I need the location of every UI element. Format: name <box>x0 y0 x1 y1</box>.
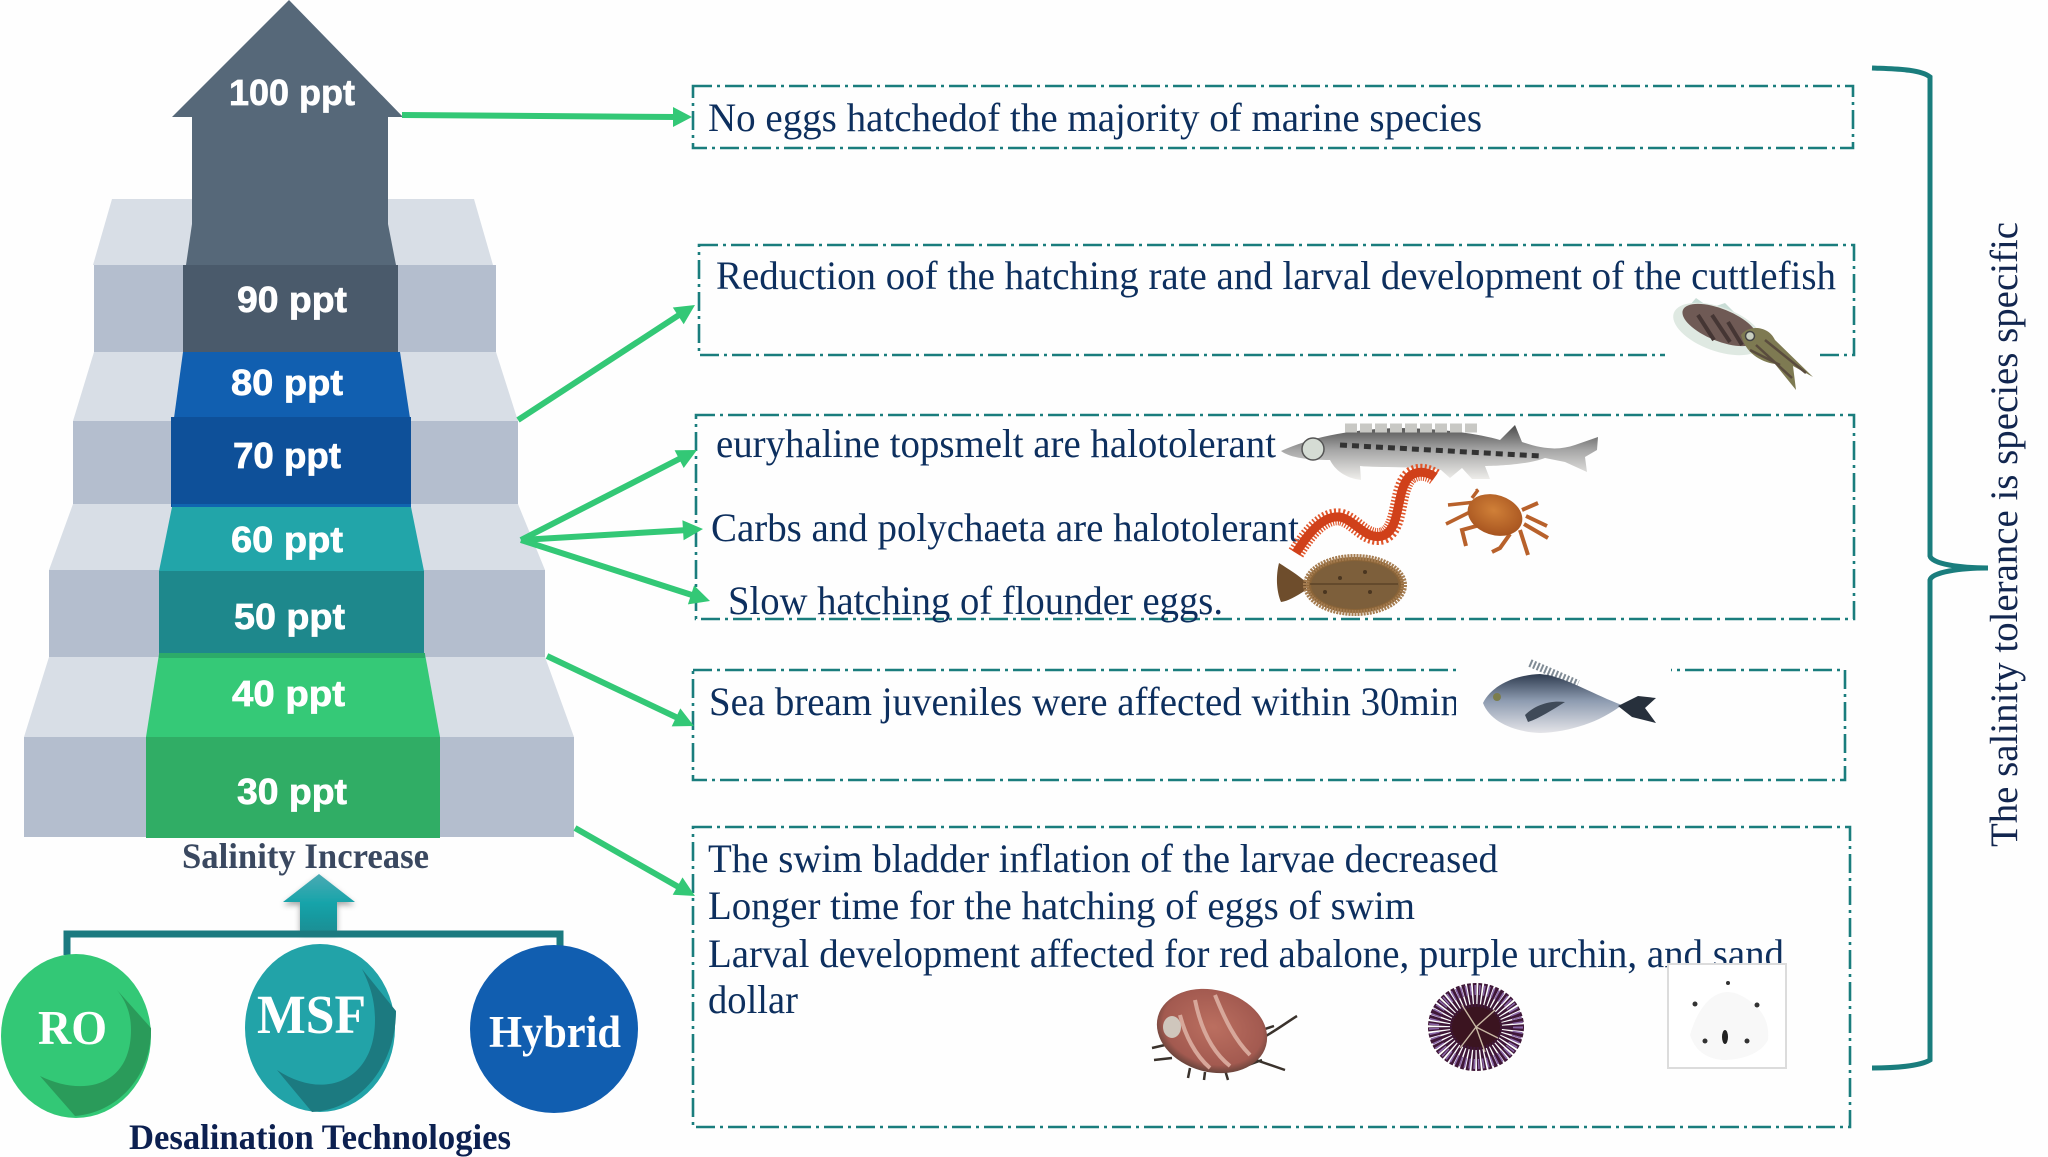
arrow: 80 ppt to panel <box>518 305 695 420</box>
40 ppt step: 40 ppt <box>232 673 345 714</box>
icon: cuttlefish <box>1666 292 1813 390</box>
RO circle: RO <box>38 1000 107 1055</box>
panel: 30 ppt effects: The swim bladder inflation of the larvae decreased <box>708 836 1498 881</box>
80 ppt step: 80 ppt <box>231 362 343 403</box>
panel: 30 ppt effects <box>693 827 1850 1127</box>
70 ppt step <box>171 417 411 507</box>
panel: 30 ppt effects: dollar <box>708 977 798 1022</box>
panel: 50-60 ppt effects: euryhaline topsmelt are halotolerant <box>716 421 1276 466</box>
arrow: 30 ppt to panel <box>575 828 695 896</box>
90 ppt step <box>183 265 398 352</box>
50 ppt step <box>159 571 424 654</box>
MSF circle: MSF <box>257 984 366 1045</box>
icon: flounder <box>1277 557 1404 613</box>
50 ppt step: 50 ppt <box>234 596 345 637</box>
icon: sturgeon <box>1281 425 1598 480</box>
Hybrid circle <box>470 945 638 1113</box>
80 ppt step <box>174 352 410 418</box>
100 ppt arrow <box>172 0 403 265</box>
panel: 40 ppt effects: Sea bream juveniles were affected within 30min <box>709 679 1460 724</box>
panel: 50-60 ppt effects <box>696 415 1854 623</box>
panel: 70-90 ppt effects: Reduction oof the hatching rate and larval development of the cuttlefish <box>716 253 1836 298</box>
icon: purple urchin <box>1434 990 1518 1064</box>
panel: 30 ppt effects: Larval development affected for red abalone, purple urchin, and sand <box>708 931 1784 976</box>
60 ppt step <box>159 507 424 571</box>
70 ppt step: 70 ppt <box>233 435 341 476</box>
MSF circle <box>245 944 396 1112</box>
heading: salinity increase: Salinity Increase <box>182 836 429 876</box>
30 ppt step: 30 ppt <box>237 771 347 812</box>
panel: 100 ppt effects: No eggs hatchedof the majority of marine species <box>708 95 1482 140</box>
connector bracket <box>67 934 560 955</box>
40 ppt step <box>146 653 440 737</box>
30 ppt step <box>146 737 440 838</box>
arrow: 60 ppt to flounder <box>521 540 710 604</box>
arrow: technologies to salinity <box>283 874 355 931</box>
icon: abalone <box>1147 977 1297 1085</box>
icon: polychaete worm <box>1296 472 1435 553</box>
arrow: 60 ppt to topsmelt <box>521 450 697 540</box>
panel: 50-60 ppt effects: Slow hatching of flounder eggs. <box>728 578 1223 623</box>
RO circle <box>1 954 151 1118</box>
panel: 30 ppt effects: Longer time for the hatching of eggs of swim <box>708 883 1415 928</box>
100 ppt arrow: 100 ppt <box>229 72 355 113</box>
icon: crab <box>1446 487 1548 555</box>
panel: 100 ppt effects <box>693 86 1853 148</box>
panel: 40 ppt effects <box>693 662 1845 780</box>
heading: desalination technologies: Desalination Technologies <box>129 1117 511 1157</box>
right curly brace <box>1872 68 1988 1068</box>
panel: 50-60 ppt effects: Carbs and polychaeta are halotolerant <box>711 505 1299 550</box>
90 ppt step: 90 ppt <box>237 279 347 320</box>
Hybrid circle: Hybrid <box>489 1007 621 1057</box>
panel: 70-90 ppt effects <box>699 245 1854 390</box>
arrow: 100 ppt to panel <box>402 107 692 127</box>
icon: sea bream <box>1483 663 1656 733</box>
icon: sand dollar <box>1668 964 1786 1068</box>
staircase side steps <box>24 199 574 837</box>
60 ppt step: 60 ppt <box>231 519 343 560</box>
arrow: 40 ppt to panel <box>547 656 694 726</box>
side conclusion text: The salinity tolerance is species specific <box>1983 222 2026 847</box>
arrow: 60 ppt to crabs <box>521 520 703 540</box>
